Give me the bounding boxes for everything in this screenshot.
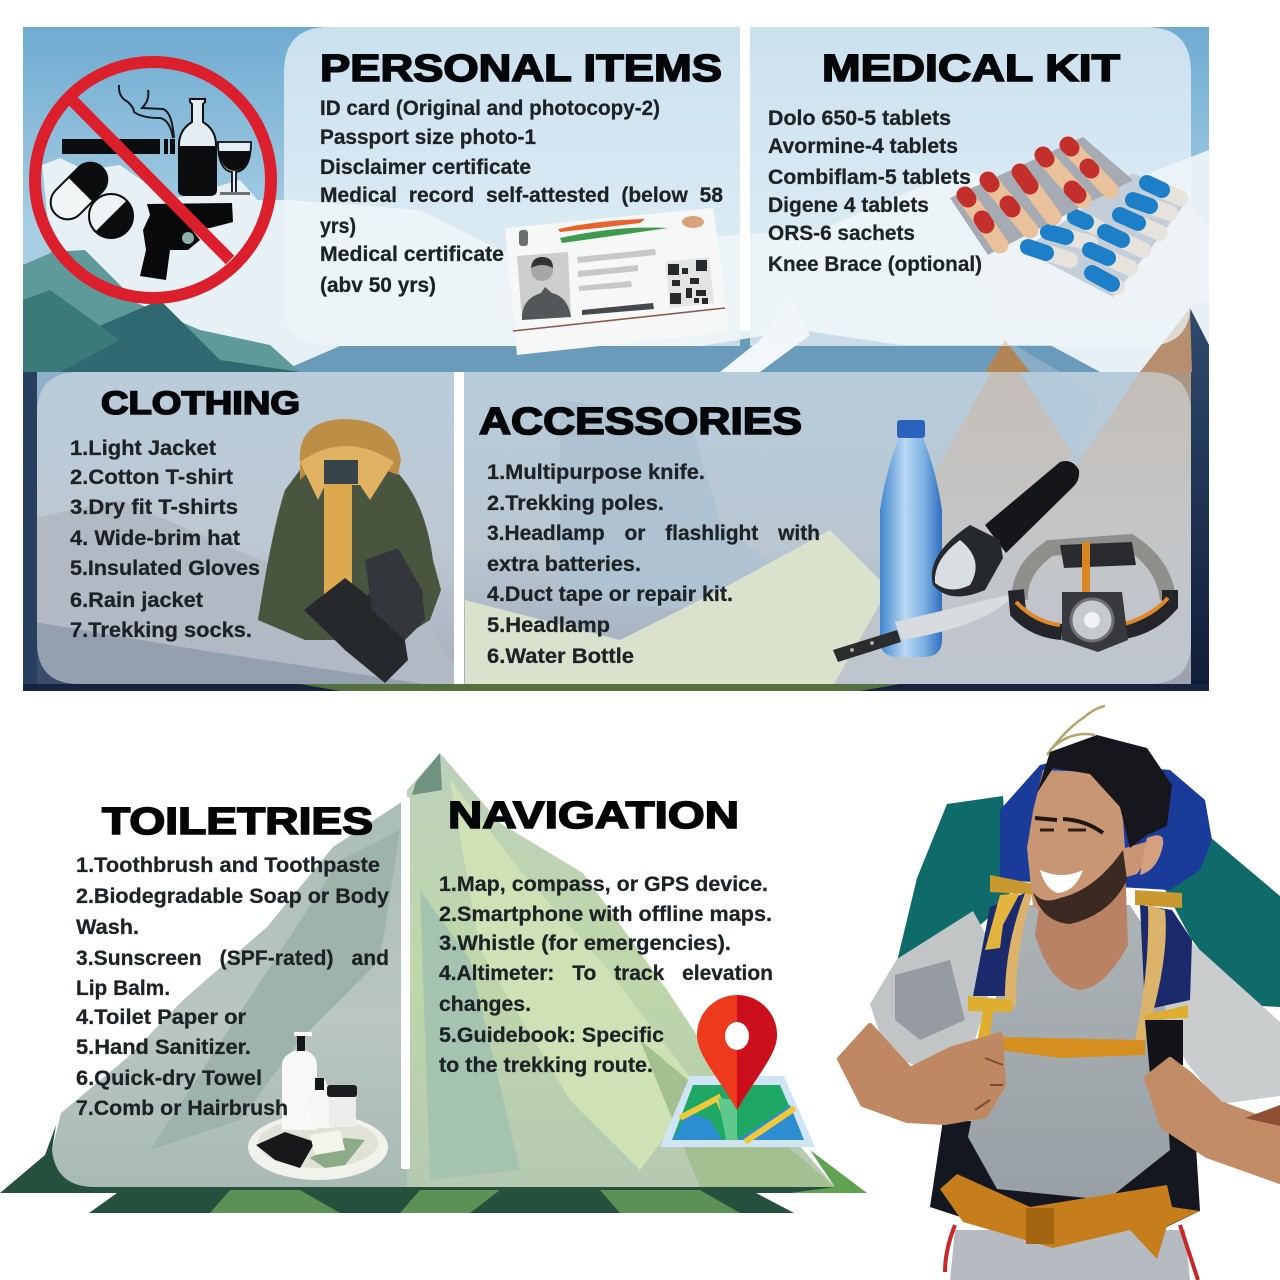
- teal bags: [893, 796, 1010, 978]
- medical kit list: Knee Brace (optional): [768, 253, 982, 276]
- toiletries list: [76, 854, 389, 1090]
- left teal mountain: [23, 240, 300, 520]
- icon: prohibited items: [35, 62, 271, 300]
- heading: medical kit: MEDICAL KIT: [822, 48, 1120, 90]
- medical kit list: Combiflam-5 tablets: [768, 166, 971, 189]
- illustration: smiling hiker with backpack: [840, 706, 1280, 1280]
- gun: [140, 203, 233, 280]
- heading: toiletries: TOILETRIES: [102, 801, 373, 843]
- blue pack: [1000, 760, 1212, 890]
- pack body lower: [930, 1120, 1200, 1230]
- accessories list: 4.Duct tape or repair kit.: [487, 583, 733, 606]
- right straps: [1140, 905, 1192, 1010]
- sleeves: [870, 911, 1000, 1070]
- clothing list: 2.Cotton T-shirt: [70, 466, 233, 489]
- accessories list: 2.Trekking poles.: [487, 492, 664, 515]
- icon: flashlight: [932, 461, 1079, 596]
- chest strap: [1000, 1037, 1145, 1058]
- navigation list: 2.Smartphone with offline maps.: [439, 903, 772, 926]
- hair: [1037, 735, 1172, 848]
- panel: medical kit: [750, 27, 1191, 346]
- accessories list: extra batteries.: [487, 553, 641, 576]
- bottle: [179, 99, 216, 195]
- personal items list: yrs): [320, 215, 356, 238]
- navigation list: 4.Altimeter: To track elevation: [439, 962, 773, 985]
- accessories list: 6.Water Bottle: [487, 645, 634, 668]
- icon: knife: [833, 593, 1016, 662]
- clothing list: [70, 437, 260, 642]
- panel: clothing: [37, 372, 454, 684]
- toiletries list: 5.Hand Sanitizer.: [76, 1036, 251, 1059]
- ring: [35, 62, 271, 298]
- heading: personal items: PERSONAL ITEMS: [320, 48, 722, 90]
- toiletries list: 6.Quick-dry Towel: [76, 1067, 262, 1090]
- right navy strip: [1170, 308, 1209, 691]
- navigation list: 1.Map, compass, or GPS device.: [439, 873, 768, 896]
- accessories list: 5.Headlamp: [487, 614, 610, 637]
- toiletries list: 2.Biodegradable Soap or Body: [76, 885, 389, 908]
- personal items list: Medical certificate: [320, 243, 504, 266]
- icon: water bottle: [880, 420, 942, 657]
- divider: mountain centre line: [401, 797, 410, 1169]
- heading: accessories: ACCESSORIES: [479, 401, 802, 443]
- trousers: [950, 1230, 1190, 1280]
- beard: [1033, 850, 1127, 924]
- icon: jacket and gloves: [258, 419, 441, 683]
- navigation list: to the trekking route.: [439, 1054, 653, 1077]
- personal items list: Medical record self-attested (below 58: [320, 184, 723, 207]
- accessories list: [487, 461, 820, 668]
- clothing list: 3.Dry fit T-shirts: [70, 496, 238, 519]
- toiletries list: 1.Toothbrush and Toothpaste: [76, 854, 380, 877]
- mountain base and trees: [0, 1125, 867, 1213]
- accessories list: 3.Headlamp or flashlight with: [487, 522, 820, 545]
- slash: [72, 100, 230, 260]
- icon: medicine blister packs: [950, 137, 1209, 320]
- personal items list: Disclaimer certificate: [320, 156, 531, 179]
- yellow top straps: [990, 875, 1040, 895]
- right arm and hand: [1147, 1060, 1280, 1181]
- bottom strip: [23, 684, 1209, 691]
- navigation list: [439, 873, 773, 1077]
- personal items list: (abv 50 yrs): [320, 274, 436, 297]
- medical kit list: Dolo 650-5 tablets: [768, 107, 951, 130]
- left arm and hand: [840, 1026, 1003, 1122]
- waist belt: [940, 1174, 1200, 1259]
- shirt: [968, 905, 1170, 1200]
- divider: lower panels: [454, 372, 464, 684]
- divider: top panels: [740, 27, 750, 331]
- heading: navigation: NAVIGATION: [448, 795, 739, 837]
- icon: ID card: [505, 208, 728, 355]
- medical kit list: Digene 4 tablets: [768, 194, 929, 217]
- wine glass: [218, 142, 251, 193]
- personal items list: Passport size photo-1: [320, 126, 536, 149]
- icon: toiletry tray: [248, 1032, 388, 1180]
- icon: map with location pin: [660, 995, 815, 1147]
- left straps: [973, 893, 1025, 996]
- personal items list: [320, 97, 723, 297]
- pills: [44, 156, 114, 226]
- clothing list: 1.Light Jacket: [70, 437, 216, 460]
- navigation list: changes.: [439, 993, 531, 1016]
- clothing list: 5.Insulated Gloves: [70, 557, 260, 580]
- toiletries list: 4.Toilet Paper or: [76, 1006, 246, 1029]
- panel: personal items: [284, 27, 740, 346]
- clothing list: 7.Trekking socks.: [70, 619, 252, 642]
- toiletries last list item: 7.Comb or Hairbrush: [76, 1097, 288, 1120]
- navigation list: 3.Whistle (for emergencies).: [439, 932, 731, 955]
- head: [1027, 770, 1163, 924]
- cigarette: [62, 139, 175, 154]
- blue range: [280, 330, 1100, 420]
- smile: [1040, 870, 1083, 893]
- medical kit list: Avormine-4 tablets: [768, 135, 958, 158]
- accessories list: 1.Multipurpose knife.: [487, 461, 705, 484]
- clothing list: 6.Rain jacket: [70, 589, 203, 612]
- left lower scene: [23, 500, 470, 691]
- panel: accessories: [464, 372, 1191, 684]
- lower base behind panels: [23, 372, 1209, 691]
- lower mountain: [52, 753, 835, 1187]
- medical kit list: [768, 107, 982, 276]
- toiletries list: 3.Sunscreen (SPF-rated) and: [76, 947, 389, 970]
- snow range: [23, 150, 1209, 372]
- toiletries list: Lip Balm.: [76, 977, 170, 1000]
- right lower scene: [560, 400, 830, 620]
- icon: headlamp: [1016, 542, 1170, 652]
- neck: [1035, 860, 1128, 990]
- top background scene: [23, 27, 1209, 691]
- rope: [1047, 706, 1105, 755]
- clothing list: 4. Wide-brim hat: [70, 527, 240, 550]
- personal items list: ID card (Original and photocopy-2): [320, 97, 660, 120]
- navigation list: 5.Guidebook: Specific: [439, 1024, 664, 1047]
- eyes and eyebrows: [1035, 818, 1103, 833]
- medical kit list: ORS-6 sachets: [768, 222, 915, 245]
- toiletries list: Wash.: [76, 916, 139, 939]
- heading: clothing: CLOTHING: [101, 385, 300, 421]
